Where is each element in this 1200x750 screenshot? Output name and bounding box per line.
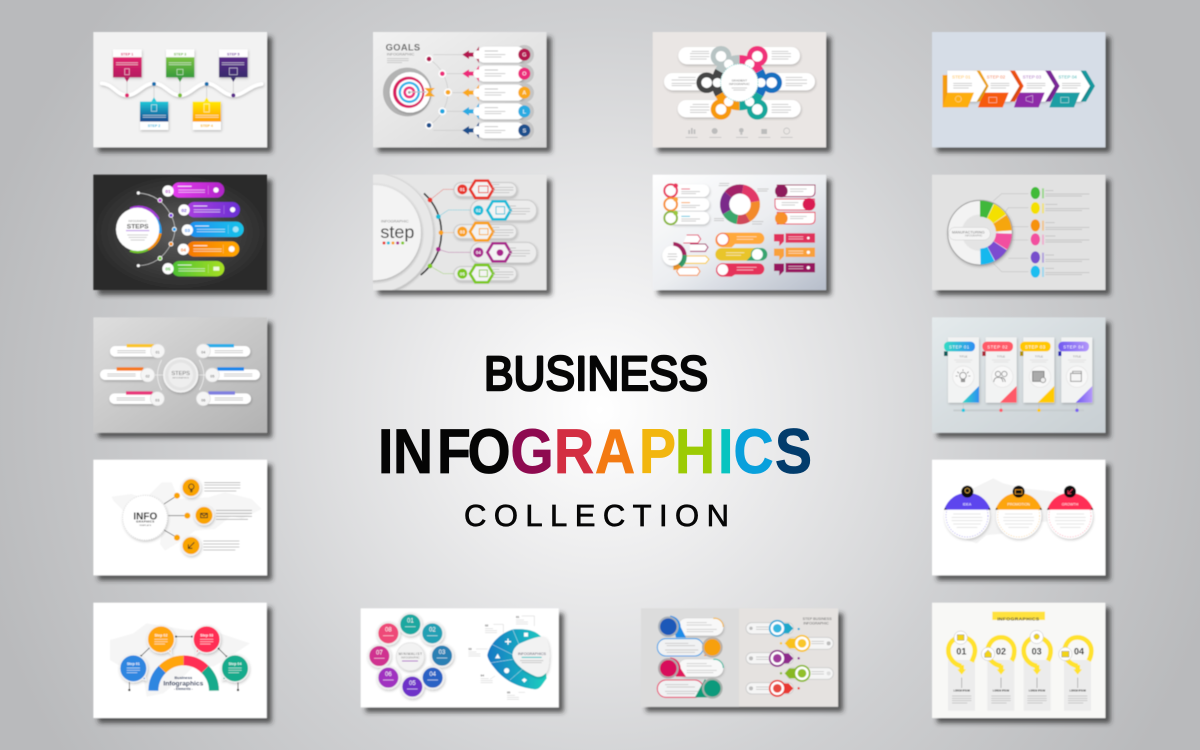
petal hub — [396, 643, 424, 671]
domes — [944, 493, 1093, 510]
petal numbers: 03 — [439, 650, 446, 656]
fan labels: 02 — [485, 624, 489, 628]
step cards and nodes: STEP 2 — [148, 124, 160, 128]
heading: step: step — [380, 222, 414, 242]
step cards and nodes — [113, 49, 248, 130]
wheel base — [948, 200, 1012, 265]
circle cards — [944, 493, 1093, 539]
number circles: 04 — [201, 351, 205, 355]
heading: goals: GOALS — [386, 43, 421, 53]
number circles: 01 — [156, 351, 160, 355]
card titles and text: TITLE — [1035, 355, 1043, 359]
numbers: 04 — [1074, 647, 1084, 657]
corner triangles — [962, 386, 1092, 403]
step tabs — [944, 342, 1089, 356]
panel: manufacturing wheel — [932, 175, 1105, 290]
column text: LOREM IPSUM — [953, 691, 970, 693]
wheel petals — [947, 199, 1013, 266]
petal numbers: 07 — [376, 650, 383, 656]
panel: business infographics elements: Step 03 — [200, 633, 213, 637]
petal numbers: 05 — [409, 681, 416, 687]
heading: infographics: INFOGRAPHICS — [378, 416, 812, 487]
band caption: Infographics — [163, 680, 204, 687]
colored ring segments — [707, 51, 771, 115]
icon badges — [954, 630, 1072, 661]
panel: yellow arcs numbered — [932, 603, 1105, 718]
numbers: 03 — [1032, 647, 1042, 657]
connector lines — [164, 497, 185, 536]
card titles and text: TITLE — [997, 355, 1005, 359]
columns — [948, 660, 1091, 711]
hexagon badges — [470, 181, 511, 282]
numbers: 01 — [460, 187, 465, 192]
number badges: 01 — [165, 189, 171, 194]
dashed rings — [946, 495, 1091, 537]
domes: GROWTH — [1062, 502, 1079, 506]
petal numbers — [376, 619, 446, 687]
band caption — [163, 675, 204, 691]
numbers — [956, 647, 1084, 657]
top-right list — [775, 185, 815, 225]
panel: six steps grey — [93, 317, 267, 433]
numbers: 02 — [476, 208, 481, 213]
panel: business infographics elements — [93, 603, 267, 718]
bottom-right tags — [774, 233, 815, 276]
right half title: STEP BUSINESS — [803, 617, 832, 621]
fan labels: 04 — [481, 674, 484, 678]
petal numbers: 01 — [407, 619, 414, 625]
fan labels: 05 — [507, 690, 511, 694]
petal numbers: 02 — [429, 628, 436, 634]
petal numbers: 06 — [385, 672, 392, 678]
black icons — [961, 486, 1076, 498]
hub — [122, 495, 168, 540]
color tabs — [117, 344, 244, 395]
numbers: 03 — [460, 229, 465, 234]
world map — [112, 482, 262, 551]
panel: gradient infographic six discs — [653, 32, 826, 147]
step tabs: STEP 03 — [1025, 344, 1046, 349]
cards — [948, 337, 1092, 403]
hub: INFO — [133, 511, 157, 522]
domes: IDEA — [963, 502, 972, 506]
left half — [641, 608, 739, 707]
curve nodes — [137, 192, 176, 267]
right half title: INFOGRAPHIC — [803, 621, 829, 625]
curved connector — [138, 193, 175, 266]
panel: step hexagons — [372, 174, 555, 299]
panel: five step wave — [93, 32, 267, 147]
top-left list — [664, 183, 709, 224]
legend — [1031, 187, 1089, 278]
centre hub with colored arc: INFOGRAPHIC — [128, 219, 147, 223]
node icons — [188, 484, 207, 548]
number circles: 05 — [210, 375, 214, 379]
hub: INFOGRAPHICS — [172, 376, 189, 379]
panel: business infographics elements: Step 02 — [154, 633, 168, 637]
fan labels: 03 — [468, 647, 472, 651]
numbers: 04 — [476, 250, 481, 255]
centre hub: GRADIENT — [732, 78, 747, 82]
world map — [950, 478, 1073, 543]
wheel title pill: MANUFACTURING — [952, 230, 985, 234]
step 03: STEP 03 — [1023, 75, 1042, 80]
timeline — [953, 403, 1084, 412]
G O A L S rows — [462, 45, 534, 140]
petal ring — [368, 613, 453, 698]
nodes — [425, 55, 452, 129]
panel: gradient mixed components — [653, 175, 826, 290]
card titles and text: TITLE — [1073, 355, 1081, 359]
number badges: 03 — [185, 228, 190, 233]
bottom-middle banners — [715, 233, 767, 277]
petal hub: MINIMALIST — [399, 652, 422, 656]
step tabs: STEP 02 — [987, 344, 1008, 349]
card titles and text: TITLE — [959, 355, 967, 359]
right half title — [803, 617, 832, 625]
panel: goals target: INFOGRAPHIC — [387, 52, 414, 57]
G O A L S rows: G — [522, 53, 527, 59]
numbers: 05 — [460, 271, 465, 276]
column text: LOREM IPSUM — [993, 691, 1009, 693]
orange nodes — [174, 478, 213, 555]
step cards and nodes: STEP 4 — [200, 124, 214, 128]
step 04 — [1049, 71, 1095, 107]
band caption: - Elements - — [174, 687, 193, 691]
step tabs: STEP 04 — [1063, 344, 1084, 349]
centre wheel — [718, 183, 762, 226]
number badges: 02 — [181, 208, 187, 213]
petal numbers: 04 — [429, 672, 437, 678]
hub links — [153, 360, 207, 390]
panel: step cards timeline — [932, 317, 1105, 433]
centre hub with colored arc — [116, 206, 162, 253]
wave ribbon — [102, 83, 262, 95]
G O A L S rows: S — [522, 128, 526, 134]
numbers — [457, 184, 483, 279]
arc nodes — [428, 198, 443, 268]
fan — [487, 629, 550, 689]
step 01 — [943, 71, 989, 107]
centre hub: INFOGRAPHIC — [729, 82, 751, 86]
heading: step: INFOGRAPHIC — [381, 219, 409, 224]
outer discs — [696, 46, 782, 120]
column text: LOREM IPSUM — [1069, 691, 1086, 693]
title — [992, 612, 1045, 622]
step 04: STEP 04 — [1058, 75, 1077, 80]
hub: GRAPHICS — [136, 519, 155, 523]
heading: business: BUSINESS — [484, 348, 708, 401]
fan: INFOGRAPHICS — [518, 652, 547, 656]
wheel title pill: INFOGRAPHIC — [965, 234, 982, 237]
target icon — [383, 68, 435, 116]
number circles: 06 — [201, 398, 205, 402]
title: INFOGRAPHICS — [997, 616, 1040, 622]
panel: four step chevrons — [932, 32, 1105, 147]
G O A L S rows: A — [522, 91, 526, 97]
right half rows — [746, 621, 833, 696]
G O A L S rows: L — [523, 109, 527, 115]
big circles — [372, 175, 436, 291]
hub: STEPS — [171, 371, 190, 377]
number circles: 02 — [146, 375, 150, 379]
step circles — [120, 626, 249, 682]
connector lines — [993, 194, 1028, 272]
panel: step business two-tone — [641, 608, 838, 707]
band caption: Business — [174, 675, 193, 680]
step 01: STEP 01 — [952, 75, 971, 80]
panel: business infographics elements: Step 04 — [228, 662, 242, 666]
number badges: 05 — [165, 267, 171, 272]
hex icons — [479, 186, 505, 277]
fan labels: 01 — [516, 615, 520, 619]
column text — [952, 678, 1087, 703]
step cards and nodes: STEP 5 — [227, 52, 240, 56]
fan labels — [468, 615, 534, 699]
bottom icons — [686, 128, 793, 137]
hub — [164, 358, 197, 392]
left and right pills — [100, 346, 260, 404]
wheel title pill — [949, 227, 990, 240]
petal numbers: 08 — [385, 628, 392, 634]
label pills — [664, 47, 815, 117]
panel: business infographics elements: Step 01 — [127, 662, 140, 666]
step 03 — [1014, 71, 1060, 107]
pills — [172, 182, 244, 276]
panel: idea promotion growth — [932, 460, 1105, 575]
centre title — [378, 348, 812, 533]
centre hub with colored arc: STEPS — [127, 223, 149, 230]
connector arrows — [129, 637, 238, 690]
panel: minimal infographic petals and fan — [361, 608, 559, 707]
numbers: 02 — [996, 647, 1006, 657]
icon circles — [953, 366, 1088, 387]
column text: LOREM IPSUM — [1029, 691, 1045, 693]
yellow arcs — [948, 637, 1091, 666]
numbers: 01 — [956, 647, 966, 657]
world map — [110, 623, 250, 697]
step 02 — [978, 71, 1024, 107]
descriptions — [203, 483, 252, 550]
panel: dark infographic steps — [93, 175, 267, 290]
number circles: 03 — [155, 398, 159, 402]
panel: info graphics template — [93, 460, 267, 575]
dark arc — [421, 193, 441, 275]
step cards and nodes: STEP 1 — [121, 52, 133, 56]
semicircle band — [153, 660, 214, 691]
step tabs: STEP 01 — [949, 344, 970, 349]
panel: goals target — [373, 32, 546, 147]
number badges: 04 — [181, 247, 186, 252]
G O A L S rows: O — [522, 72, 527, 78]
row outlines — [454, 183, 537, 281]
domes: PROMOTION — [1007, 502, 1030, 506]
dashed links — [430, 189, 475, 274]
petal hub: INFOGRAPHIC — [401, 656, 420, 660]
arcs and connector lines — [429, 55, 463, 130]
step cards and nodes: STEP 3 — [174, 52, 186, 56]
bottom-left ring — [662, 235, 709, 275]
number badges — [162, 185, 193, 274]
centre hub — [721, 64, 758, 101]
hub: TEMPLATE — [139, 524, 152, 527]
card titles and text — [954, 355, 1086, 362]
number circles — [141, 344, 219, 406]
step 02: STEP 02 — [987, 75, 1006, 80]
heading: collection: COLLECTION — [464, 498, 729, 533]
